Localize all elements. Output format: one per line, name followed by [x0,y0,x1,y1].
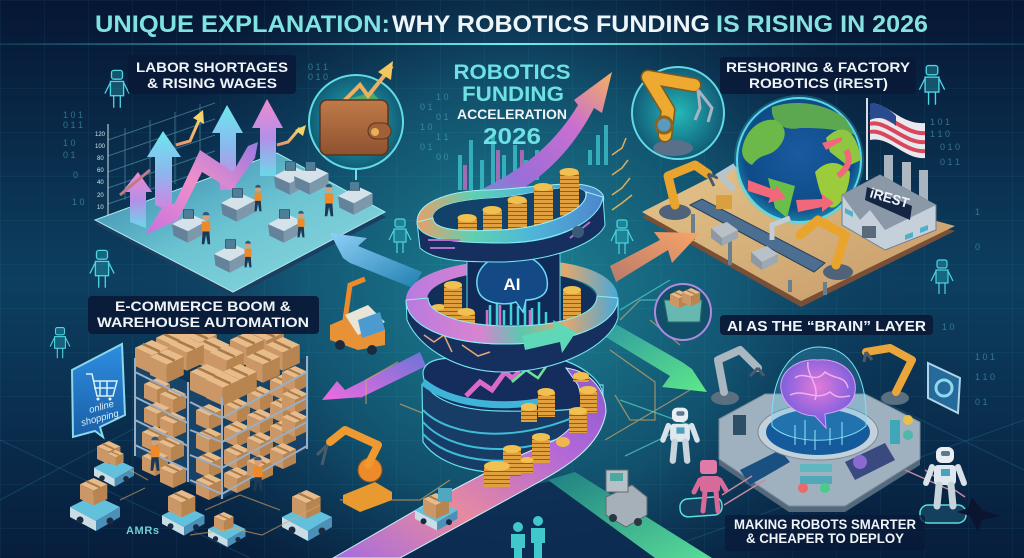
binary data columns: 1 0 1 [975,352,995,362]
binary data columns: 1 1 0 [930,129,950,139]
truck with crane [330,279,385,355]
icon: robot arm medallion [632,67,724,159]
small gold trend arrows [612,138,632,210]
binary data columns: 1 0 [942,322,955,332]
icon: us flag [867,98,925,180]
chart grid: 20 [97,193,104,199]
arrow: green to brain [604,322,707,392]
human silhouettes [511,516,545,558]
amr path lines [120,470,320,535]
binary data columns: 1 1 0 [975,372,995,382]
gray cart [606,470,647,527]
center heading: ACCELERATION [457,106,567,122]
binary data columns: 0 1 0 [308,72,328,82]
label: labor shortages: LABOR SHORTAGES [136,59,288,75]
center heading [454,61,570,149]
center heading: FUNDING [462,83,564,106]
chart grid [95,103,215,215]
small outline robot icons [50,66,953,358]
middle ring front [406,296,618,372]
label: reshoring [720,57,916,94]
title: UNIQUE EXPLANATION: [95,11,390,38]
middle ring back [406,260,618,344]
center heading: 2026 [483,123,541,149]
top ring [417,168,605,262]
online shopping panel: shopping [80,408,121,429]
green floor road [548,472,712,558]
gear screen [928,363,960,413]
label: labor shortages [128,55,296,94]
arrow: magenta to warehouse [322,352,426,400]
robot: pink [694,460,726,511]
label: e-commerce: WAREHOUSE AUTOMATION [97,314,309,330]
binary data columns: 1 0 1 [930,117,950,127]
orange robot arm [864,348,912,405]
binary data columns: 1 [975,207,980,217]
binary data columns: 0 1 [975,397,988,407]
icon: irest factory [842,155,936,250]
dark floor panels [400,480,655,558]
label: amrs: AMRs [126,525,159,537]
coin stacks on ribbon [484,372,597,487]
chart bars behind helix [460,125,606,190]
desks and workers [172,162,373,273]
label: reshoring: RESHORING & FACTORY [726,59,911,75]
green connector pads [679,496,966,523]
circuit traces [340,300,690,500]
robot: white left [663,408,697,461]
robot: white right [926,447,964,506]
globe [734,95,864,225]
ai panel [467,240,560,332]
title [95,11,928,38]
binary data columns: 0 [975,242,980,252]
brain dome [758,347,878,460]
online shopping panel [72,344,125,437]
pink ribbon road [333,368,606,558]
center heading: ROBOTICS [454,61,570,84]
isometric office platform [95,153,386,297]
label: making robots smarter [725,515,925,551]
chart grid: 80 [97,156,104,162]
orange robot arm [317,430,392,512]
label: labor shortages: & RISING WAGES [147,75,277,91]
label: making robots smarter: MAKING ROBOTS SMARTER [734,517,916,532]
chart grid: 10 [97,205,104,211]
binary data columns: 0 1 1 [308,62,328,72]
arrow: blue to labor [330,233,422,288]
forklift on road [415,488,458,531]
icon: wallet [309,61,403,180]
factory platform [642,166,955,307]
chart grid: 60 [97,168,104,174]
big funding arrow [440,72,612,212]
control console [719,394,920,512]
binary data columns: 1 0 [63,138,76,148]
amr delivery robots [70,441,332,547]
title: WHY ROBOTICS FUNDING [392,11,710,38]
binary data columns: 1 0 [436,92,449,102]
label: e-commerce [88,296,319,334]
chart grid: 40 [97,180,104,186]
chart grid: 120 [95,132,106,138]
binary data columns: 0 [73,170,78,180]
panel: reshoring and factory robotics [632,57,955,307]
binary data columns [63,62,995,407]
icon: ai brain [477,254,547,312]
label: e-commerce: E-COMMERCE BOOM & [115,298,291,314]
label: ai brain layer: AI AS THE “BRAIN” LAYER [727,318,926,335]
coin stacks top [458,168,579,233]
shelving racks with boxes [135,322,308,500]
arrow: orange to factory [610,232,700,282]
online shopping panel: online [88,399,115,416]
chart grid: 100 [95,144,106,150]
label: reshoring: ROBOTICS (iREST) [749,75,888,91]
title: IS RISING IN 2026 [716,11,928,38]
panel: e-commerce warehouse [70,279,392,547]
binary data columns: 0 1 1 [940,157,960,167]
watermark star logo [957,497,1000,532]
icon: irest factory: iREST [868,185,911,211]
ai panel: AI [504,275,520,294]
lower ring [422,353,603,473]
binary data columns: 0 1 [63,150,76,160]
panel: central funding helix [333,61,712,558]
binary data columns: 0 1 0 [940,142,960,152]
binary data columns: 1 0 [420,122,433,132]
binary data columns: 0 1 [420,142,433,152]
binary data columns: 0 1 [436,112,449,122]
rising arrows and zigzag [120,99,306,235]
binary data columns: 1 0 [72,197,85,207]
arrows: flows from center [322,138,707,500]
icon: medallion with cart [655,284,711,340]
binary data columns: 0 0 [436,152,449,162]
binary data columns: 0 1 [420,102,433,112]
label: making robots smarter: & CHEAPER TO DEPLOY [746,531,904,546]
panel: labor shortages [95,55,403,297]
binary data columns: 0 1 1 [63,120,83,130]
conveyor line with robot arms [659,165,853,295]
gray robot arm [711,350,764,405]
panel: ai as the brain layer [606,284,966,551]
binary data columns: 1 1 [436,132,449,142]
coin stacks middle [432,281,581,333]
binary data columns: 1 0 1 [63,110,83,120]
